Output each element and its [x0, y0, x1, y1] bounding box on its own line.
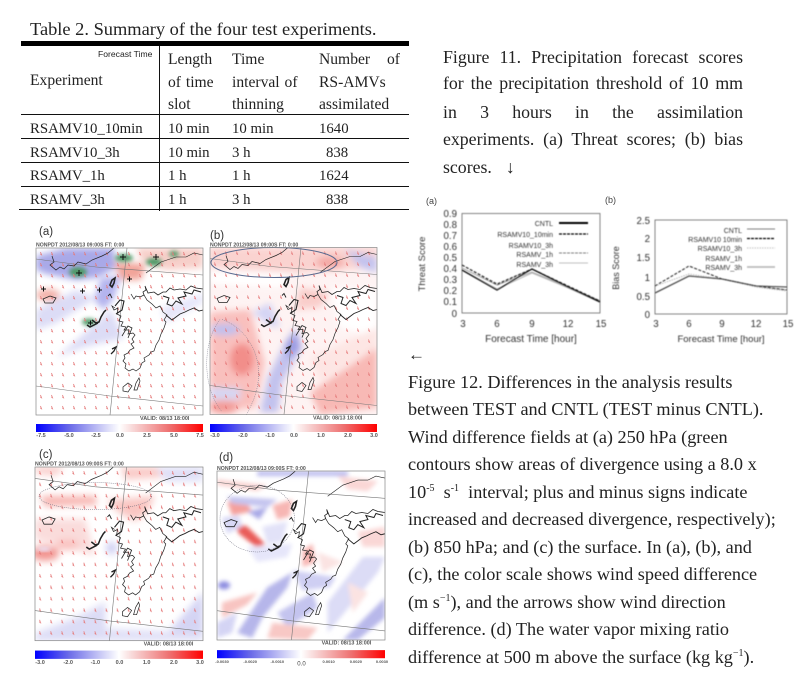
x axis tick labels: 6: [494, 319, 500, 330]
color scale: 3.0: [370, 433, 378, 439]
color scale: [35, 651, 204, 666]
text block: figure 12 caption: between TEST and CNTL (TEST minus CNTL).: [408, 399, 763, 419]
legend: [497, 221, 588, 269]
header cell: time interval of thinning: [232, 51, 298, 113]
y axis title: Bias Score: [611, 246, 621, 290]
row: RSAMV_1h: [30, 168, 349, 184]
row: RSAMV_3h: 3 h: [232, 192, 250, 208]
text block: figure 12 caption: Wind difference fields at (a) 250 hPa (green: [408, 427, 728, 447]
text block: figure 12 caption: increased and decreased divergence, respectively);: [408, 509, 776, 529]
y axis tick labels: 0.8: [444, 220, 457, 231]
color scale: 5.0: [170, 433, 178, 439]
map panel (c): surface wind difference: [31, 448, 204, 666]
legend: RSAMV_3h: [516, 262, 553, 269]
wind speed shading: [36, 248, 203, 358]
text block: figure 12 caption: difference at 500 m above the surface (kg kg−1).: [408, 647, 754, 667]
color scale: 0.0: [116, 660, 123, 666]
x axis tick labels: 9: [529, 319, 535, 330]
color scale: 0.0: [116, 433, 124, 439]
x axis title: Forecast Time [hour]: [677, 334, 765, 345]
green divergence contours: [69, 251, 179, 326]
plus signs: [41, 254, 159, 326]
text block: figure 11 caption: for the precipitation threshold of 10 mm: [443, 73, 743, 93]
header cell: number of RS-AMVs assimilated: RS-AMVs: [319, 74, 386, 90]
text block: figure 12 caption: (b) 850 hPa; and (c) the surface. In (a), (b), and: [408, 537, 752, 557]
valid time label: VALID: 08/13 18:00I: [144, 641, 194, 647]
panel label (b) for precipitation charts: (b): [605, 195, 616, 205]
y axis title: Threat Score: [417, 237, 428, 291]
y axis tick labels: 1: [645, 273, 650, 284]
x axis tick labels: 3: [653, 319, 659, 330]
circled area: north: [211, 248, 337, 278]
data lines: [462, 265, 600, 302]
legend: CNTL: [535, 221, 553, 228]
panel: table of four test experiments: [19, 19, 409, 211]
row: RSAMV_3h: RSAMV_3h: [30, 192, 105, 208]
row: RSAMV10_10min: RSAMV10_10min: [30, 121, 143, 137]
map panel (d): water vapor mixing ratio difference: [215, 451, 389, 667]
legend: [688, 228, 775, 272]
y axis tick labels: [637, 216, 651, 321]
x axis tick labels: 12: [751, 319, 761, 330]
color scale: [210, 424, 378, 439]
text block: figure 12 caption: (m s−1), and the arrows show wind direction: [408, 592, 726, 612]
header label: NONPDT 2012/08/13 09:00S FT: 0:00: [217, 466, 306, 472]
legend: RSAMV10_3h: [698, 246, 742, 253]
text block: figure 11 caption: experiments. (a) Threat scores; (b) bias: [443, 129, 743, 149]
header cell: number of RS-AMVs assimilated: [319, 51, 400, 113]
text block: figure 12 caption: 10-5 s-1 interval; plus and minus signs indicate: [408, 482, 747, 502]
arrow: pointing left to figure 12: ←: [408, 345, 425, 364]
valid time label: VALID: 08/13 18:00I: [140, 416, 190, 422]
text block: figure 12 caption: contours show areas of divergence using a 8.0 x: [408, 454, 757, 474]
y axis tick labels: 0.3: [444, 275, 457, 286]
color scale: -2.0: [238, 433, 248, 439]
dotted circled area: [220, 485, 294, 552]
header cell: length of time slot: of time: [168, 74, 214, 90]
header cell: number of RS-AMVs assimilated: assimilated: [319, 96, 389, 113]
y axis tick labels: 2.5: [637, 216, 650, 227]
header cell: forecast time: Forecast Time: [98, 49, 152, 59]
row: RSAMV10_10min: 1640: [319, 121, 349, 137]
chart: bias score: [611, 216, 793, 345]
x axis title: Forecast Time [hour]: [485, 334, 577, 345]
water vapor shading: [217, 471, 385, 640]
table title: Table 2. Summary of the four test experiments.: [30, 19, 377, 39]
valid time label: VALID: 08/13 18:00I: [313, 416, 363, 422]
x axis tick labels: 9: [719, 319, 725, 330]
y axis tick labels: 0.4: [444, 264, 458, 275]
row: RSAMV_1h: 1 h: [168, 168, 186, 184]
row: RSAMV10_3h: 10 min: [168, 145, 210, 161]
header label: NONPDT 2012/08/13 09:00S FT: 0:00: [36, 242, 124, 248]
y axis tick labels: [444, 209, 458, 320]
y axis tick labels: 2: [645, 234, 650, 245]
color scale: 3.0: [196, 660, 204, 666]
row: RSAMV_3h: [30, 192, 348, 208]
x axis tick labels: 6: [686, 319, 692, 330]
valid time label: VALID: 08/13 18:00I: [322, 641, 372, 647]
y axis tick labels: 0.1: [444, 297, 457, 308]
dotted circled area: [39, 483, 152, 510]
color scale: -2.5: [91, 433, 101, 439]
legend: RSAMV10_3h: [509, 243, 553, 250]
legend: RSAMV_1h: [516, 252, 553, 259]
color scale: -0.0020: [243, 659, 258, 664]
text block: figure 12 caption: difference. (d) The water vapor mixing ratio: [408, 619, 729, 639]
text block: figure 11 caption: scores. ↓: [443, 157, 515, 177]
y axis tick labels: 0.6: [444, 242, 457, 253]
panel letter: (b): [210, 230, 224, 242]
color scale: 2.0: [344, 433, 352, 439]
panel label (a) for precipitation charts: (a): [426, 196, 437, 206]
legend: RSAMV10 10min: [688, 237, 742, 244]
x axis tick labels: 3: [460, 319, 466, 330]
color scale: -3.0: [210, 433, 220, 439]
legend: RSAMV10_10min: [497, 232, 553, 239]
x axis tick labels: 15: [783, 319, 793, 330]
color scale: 0.0020: [350, 659, 363, 664]
row: RSAMV_3h: 838: [326, 192, 348, 208]
x axis tick labels: [460, 319, 606, 330]
color scale: 0.0: [290, 433, 298, 439]
panel letter: (d): [219, 451, 233, 464]
table top rule: [21, 41, 409, 46]
y axis tick labels: 1.5: [637, 253, 650, 264]
table row rules: [19, 46, 409, 211]
header cell: length of time slot: [168, 51, 214, 113]
x axis tick labels: 12: [563, 319, 573, 330]
legend: CNTL: [724, 228, 742, 235]
map panel (a): 250 hPa wind difference: [36, 226, 204, 439]
row: RSAMV10_10min: 10 min: [168, 121, 210, 137]
header cell: length of time slot: slot: [168, 96, 191, 113]
color scale: 7.5: [196, 433, 204, 439]
panel letter: (a): [39, 226, 53, 238]
x axis tick labels: 15: [596, 319, 606, 330]
header label: NONPDT 2012/08/13 09:00S FT: 0:00: [35, 461, 124, 467]
header cell: experiment: Experiment: [30, 72, 103, 89]
color scale: 0.0: [297, 661, 306, 667]
row: RSAMV_1h: 1624: [319, 168, 349, 184]
color scale: -1.0: [91, 660, 100, 666]
color scale: 0.0030: [376, 659, 389, 664]
color scale: [36, 424, 204, 439]
row: RSAMV_3h: 1 h: [168, 192, 186, 208]
text block: figure 12 caption: Figure 12. Differences in the analysis results: [408, 372, 732, 392]
text block: figure 11 caption: [443, 47, 743, 177]
color scale: 0.0010: [323, 659, 336, 664]
header cell: time interval of thinning: interval of: [232, 74, 298, 90]
row: RSAMV10_10min: [30, 121, 349, 137]
y axis tick labels: 0.9: [444, 209, 457, 220]
y axis tick labels: 0: [645, 310, 651, 321]
row: RSAMV_1h: 1 h: [232, 168, 250, 184]
color scale: -3.0: [35, 660, 45, 666]
legend: RSAMV_3h: [705, 265, 742, 272]
row: RSAMV_1h: RSAMV_1h: [30, 168, 105, 184]
header cell: time interval of thinning: Time: [232, 51, 264, 68]
x axis tick labels: [653, 319, 793, 330]
color scale: 1.0: [317, 433, 325, 439]
color scale: 2.0: [170, 660, 178, 666]
header cell: length of time slot: Length: [168, 51, 212, 68]
panel: all figures: [34, 196, 794, 666]
color scale: 2.5: [143, 433, 151, 439]
text block: figure 11 caption: in 3 hours in the assimilation: [443, 102, 743, 122]
row: RSAMV10_10min: 10 min: [232, 121, 274, 137]
y axis tick labels: 0.5: [637, 292, 650, 303]
y axis tick labels: 0: [452, 309, 458, 320]
row: RSAMV10_3h: 838: [326, 145, 348, 161]
header label: NONPDT 2012/08/13 09:00S FT: 0:00: [210, 242, 298, 248]
color scale: [215, 650, 389, 667]
data lines: [655, 266, 787, 293]
color scale: -7.5: [36, 433, 46, 439]
chart: threat score: [417, 209, 606, 345]
map panel (b): 850 hPa wind difference: [207, 230, 378, 439]
header cell: time interval of thinning: thinning: [232, 96, 284, 113]
row: RSAMV10_3h: [30, 145, 348, 161]
header cell: number of RS-AMVs assimilated: Number of: [319, 51, 400, 68]
y axis tick labels: 0.2: [444, 286, 457, 297]
color scale: -1.0: [265, 433, 275, 439]
wind speed shading: [31, 467, 203, 641]
row: RSAMV10_3h: RSAMV10_3h: [30, 145, 120, 161]
color scale: -2.0: [63, 660, 73, 666]
circled area: west: [207, 320, 259, 416]
row: RSAMV10_3h: 3 h: [232, 145, 250, 161]
color scale: -5.0: [64, 433, 74, 439]
panel letter: (c): [39, 448, 53, 461]
text block: figure 12 caption: (c), the color scale shows wind speed difference: [408, 564, 757, 584]
y axis tick labels: 0.7: [444, 231, 457, 242]
wind speed shading: [210, 248, 377, 414]
legend: RSAMV_1h: [705, 256, 742, 263]
color scale: -0.0010: [271, 659, 285, 664]
color scale: -0.0030: [215, 659, 230, 664]
text block: figure 12 caption: [408, 372, 776, 667]
color scale: 1.0: [143, 660, 151, 666]
text block: figure 11 caption: Figure 11. Precipitation forecast scores: [443, 47, 743, 67]
y axis tick labels: 0.5: [444, 253, 457, 264]
